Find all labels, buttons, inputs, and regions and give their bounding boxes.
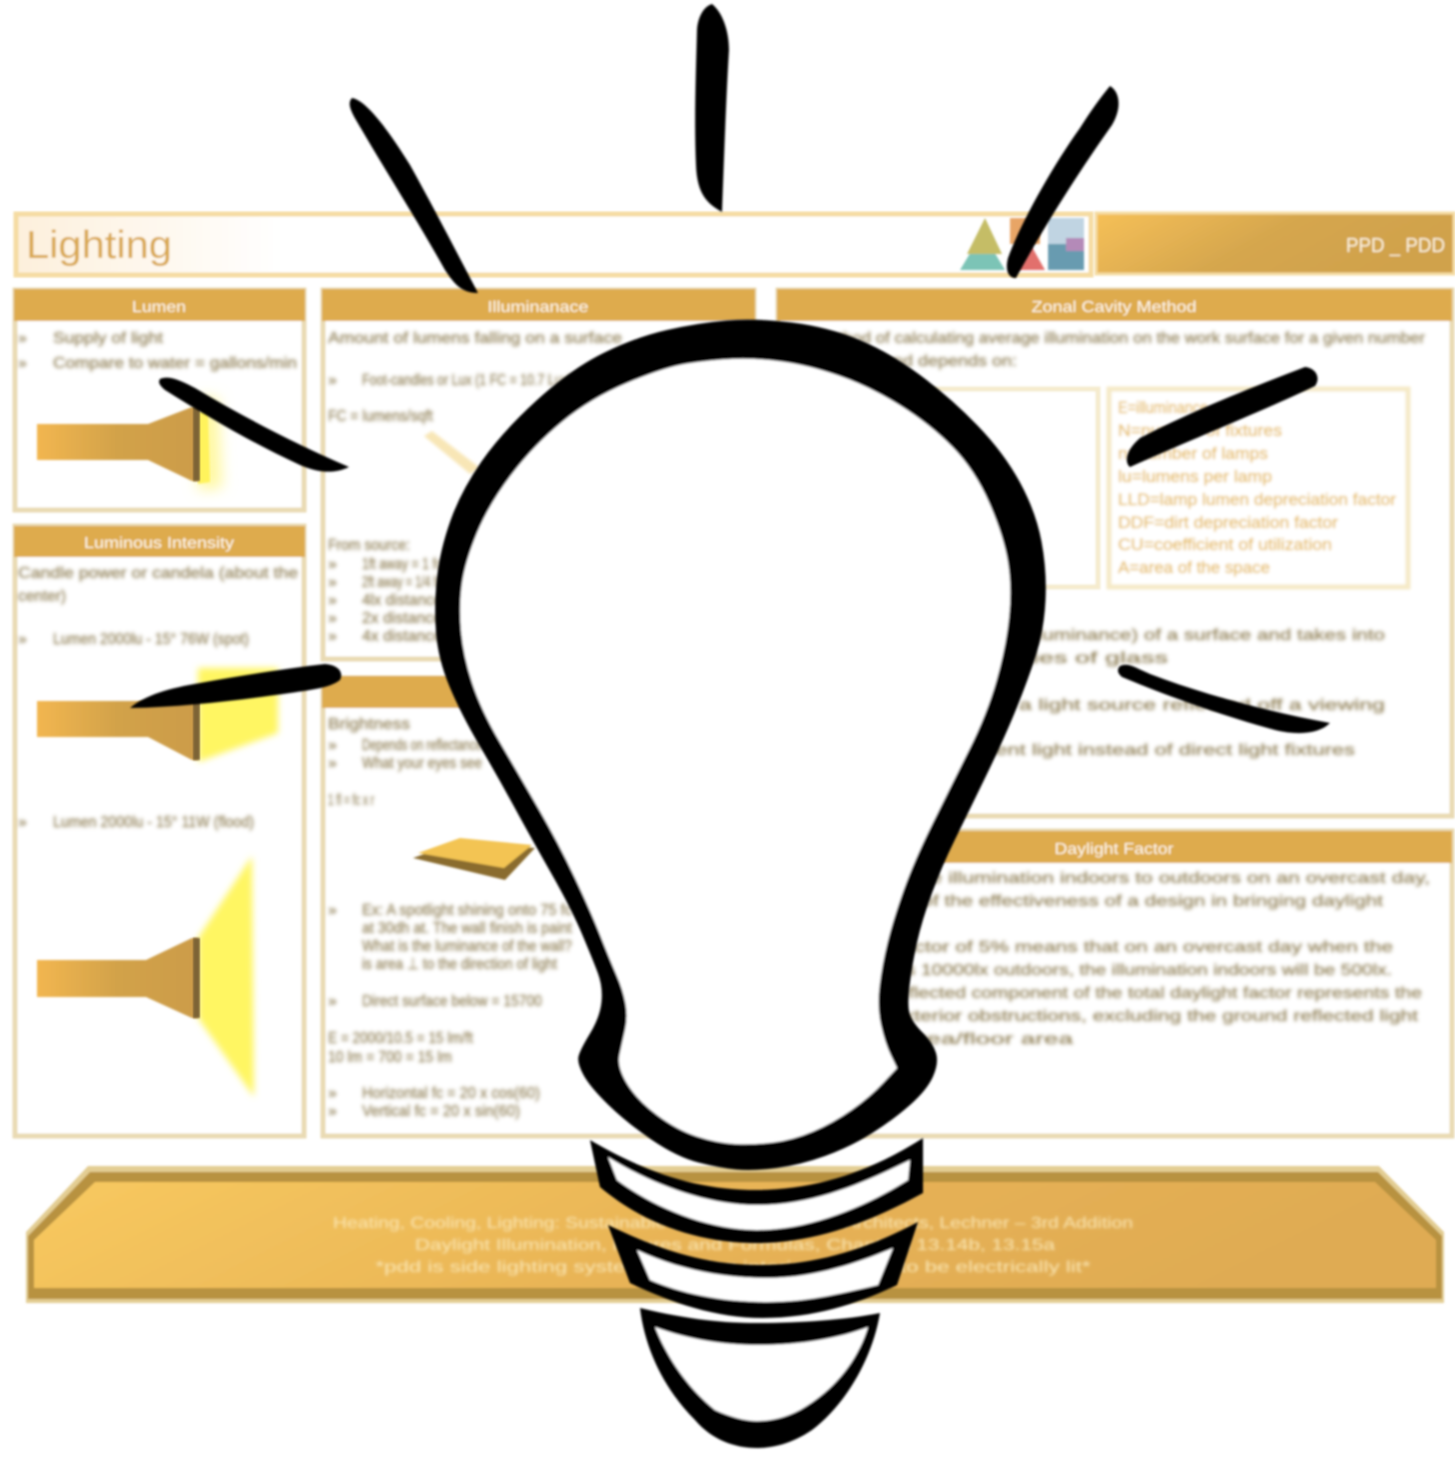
icon: lit surface [413,838,535,880]
panel: Luminance: » [328,755,337,772]
socket ring 1 [590,1138,923,1243]
panel: Daylight Factor: an indication of the effectiveness of a design in bringing daylight [800,893,1384,910]
footer references [333,1215,1133,1276]
ray: left lower [130,664,341,708]
panel: Illuminance: Foot-candles or Lux (1 FC = 10.7 Lux) [362,372,572,389]
icon: flashlight medium beam [37,668,278,762]
panel: Daylight Factor [777,831,1452,1136]
ray: right upper [1127,367,1318,467]
panel: Luminous Intensity: Luminous Intensity [84,535,234,552]
panel: Illuminance: 1ft away = 1 fc [362,556,442,573]
panel: Illuminance: » [328,556,337,573]
panel: Luminous Intensity: Candle power or candela (about the [18,565,298,582]
panel: Illuminance: FC = lumens/sqft [328,408,433,425]
icon: light ray to surface [424,431,480,474]
panel: Lumen: » [18,355,27,372]
panel: Daylight Factor: Externally reflected component of the total daylight factor represents the [800,985,1422,1002]
header band: PPD _ PDD [1096,213,1454,274]
box: formula variables [1109,389,1408,587]
panel: Illuminance: » [328,574,337,591]
panel: Zonal Cavity Method: Measures the brightness (luminance) of a surface and takes into [800,627,1385,644]
footer references: Daylight Illumination, Figures and Formulas, Chapters 13.14b, 13.15a [415,1237,1055,1254]
panel: Illuminance: » [328,592,337,609]
title: Lighting: Lighting [26,224,172,267]
box: formula variables: CU=coefficient of utilization [1118,535,1332,554]
panel: Illuminance: Amount of lumens falling on a surface [328,330,622,347]
panel: Luminance: Ex: A spotlight shining onto 75 fc [362,902,572,919]
panel: Daylight Factor: light from exterior obstructions, excluding the ground reflected light [800,1008,1419,1025]
panel: Illuminance: 2ft away = 1/4 fc [362,574,442,591]
box: formula variables: E=illuminance [1118,398,1208,417]
box: formula variables: lu=lumens per lamp [1118,467,1272,486]
footer references: *pdd is side lighting system, allowing interior daylight to be electrically lit* [376,1259,1090,1276]
panel: Daylight Factor: Daylight Factor [1054,841,1174,858]
icon: flashlight wide beam [37,856,254,1097]
panel: Zonal Cavity Method: account the properties of glass [800,650,1168,667]
panel: Illuminance [322,289,755,659]
panel: Zonal Cavity Method: A method of calculating average illumination on the work surface for a given number [800,330,1426,347]
box: formula variables: DDF=dirt depreciation factor [1118,513,1338,532]
ray: upper left [350,98,478,293]
panel: Zonal Cavity Method: Zonal Cavity Method [1032,299,1196,316]
panel: Daylight Factor: illumination is 10000lx outdoors, the illumination indoors will be 500lx. [800,962,1392,979]
panel: Daylight Factor: The ratio of the illumination indoors to outdoors on an overcast day, [800,870,1430,887]
panel: Luminance: Depends on reflectance [362,737,482,754]
box: formula variables: n=number of lamps [1118,444,1268,463]
panel: Luminance: at 30dh at. The wall finish is paint [362,920,572,937]
panel: Illuminance: 4lx distance [362,592,442,609]
panel: Illuminance: » [328,372,337,389]
ray: left upper [159,378,349,472]
panel: Luminance: What is the luminance of the wall? [362,938,572,955]
icon: flashlight narrow beam [37,398,222,490]
panel: Lumen: Lumen [132,299,186,316]
ray: right lower [1118,665,1330,733]
ray: upper right [1007,86,1119,278]
panel: Luminance: What your eyes see [362,755,482,772]
panel: Daylight Factor: A daylight factor of 5% means that on an overcast day when the [800,939,1393,956]
panel: Luminance: E = 2000/10.5 = 15 lm/ft [328,1030,473,1047]
panel: Lumen: » [18,330,27,347]
panel: Luminous Intensity: Lumen 2000lu - 15° 11W (flood) [53,814,254,831]
panel: Luminance: is area ⊥ to the direction of light [362,956,557,973]
panel: Illuminance: » [328,628,337,645]
ray: top [695,4,729,212]
panel: Luminance: » [328,902,337,919]
panel: Lumen: Compare to water = gallons/min [53,355,297,372]
panel: Luminous Intensity [14,526,305,1136]
panel: Zonal Cavity Method: Avoid by using ambient light instead of direct light fixtures [800,742,1355,759]
header band: PPD _ PDD: PPD _ PDD [1346,235,1445,257]
panel: Illuminance: 4x distance [362,628,442,645]
panel: Luminous Intensity: » [18,814,27,831]
panel: Luminous Intensity: center) [18,588,66,605]
panel: Lumen: Supply of light [53,330,164,347]
socket ring 2 [608,1222,918,1318]
panel: Illuminance: From source: [328,537,410,554]
panel: Luminance: » [328,737,337,754]
footer references: Heating, Cooling, Lighting: Sustainable Design Methods for Architects, Lechner – 3rd Addition [333,1215,1133,1232]
panel: Daylight Factor: from the area/floor area [800,1031,1073,1048]
panel: Luminance: » [328,1085,337,1102]
panel: Luminance: » [328,1103,337,1120]
panel: Illuminance: » [328,610,337,627]
box: formula variables: A=area of the space [1118,558,1270,577]
footer banner [26,1166,1444,1303]
panel: Zonal Cavity Method: Glare is the image of a light source reflected off a viewing [800,697,1385,714]
title bar [16,214,1091,275]
panel: Luminance: Vertical fc = 20 x sin(60) [362,1103,520,1120]
box: formula variables: LLD=lamp lumen depreciation factor [1118,490,1396,509]
panel: Luminance: 1 fl = fc x r [328,792,374,809]
panel: Illuminance: 2x distance [362,610,442,627]
panel: Luminance: Brightness [328,716,410,733]
box: formula variables: N=number of fixtures [1118,421,1282,440]
panel: Illuminance: Illuminanace [488,299,589,316]
panel: Luminance: » [328,993,337,1010]
panel: Zonal Cavity Method: of fixtures and depends on: [800,353,1017,370]
panel: Luminous Intensity: Lumen 2000lu - 15° 76W (spot) [53,631,249,648]
bulb glass [435,320,1046,1170]
panel: Luminance: Luminance [499,685,577,702]
panel: Lumen [14,289,305,510]
panel: Luminance: Direct surface below = 15700 [362,993,542,1010]
panel: Luminous Intensity: » [18,631,27,648]
panel: Luminance: Horizontal fc = 20 x cos(60) [362,1085,540,1102]
socket cap [640,1308,880,1448]
panel: Luminance: 10 lm = 700 = 15 lm [328,1049,452,1066]
panel: Zonal Cavity Method [777,289,1452,816]
panel: Luminance [322,676,755,1136]
box: formula [800,389,1098,587]
logo [960,218,1084,270]
